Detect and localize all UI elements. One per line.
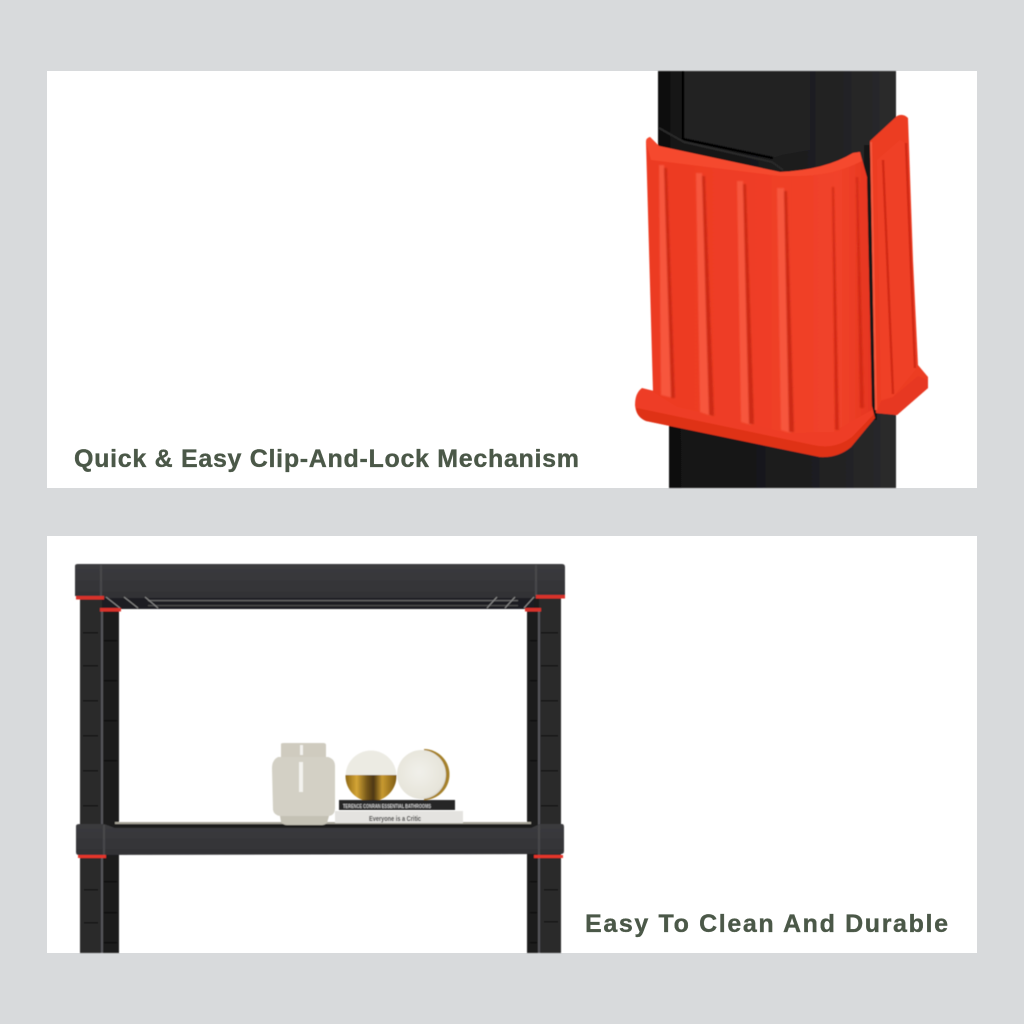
gold and white sphere <box>346 750 396 802</box>
top shelf <box>75 564 565 609</box>
red clip accents, middle shelf <box>78 855 563 858</box>
clip flange <box>635 388 875 457</box>
clip body <box>646 137 872 433</box>
books <box>335 800 463 823</box>
panel background <box>47 71 977 488</box>
left post <box>80 598 119 953</box>
books: Everyone is a Critic <box>369 816 421 823</box>
red clip accents, top shelf <box>76 595 565 612</box>
clip top rim <box>646 137 862 176</box>
panel: clip-and-lock mechanism <box>47 71 977 488</box>
clip ribs <box>659 165 864 433</box>
panel: easy to clean <box>47 536 977 953</box>
right post <box>527 598 561 953</box>
heading: easy to clean: Easy To Clean And Durable <box>585 910 948 938</box>
red clip right piece <box>870 115 928 415</box>
white sphere <box>397 749 450 800</box>
middle shelf <box>76 822 564 855</box>
photo: black shelving unit <box>75 564 565 953</box>
vase <box>272 743 335 825</box>
heading: clip-and-lock: Quick & Easy Clip-And-Lock Mechanism <box>74 445 579 473</box>
red clip front piece <box>635 137 875 457</box>
lower black post <box>669 400 896 488</box>
books: TERENCE CONRAN ESSENTIAL BATHROOMS <box>343 804 431 810</box>
panel background <box>47 536 977 953</box>
dark gap between clips <box>864 145 877 420</box>
photo: black post with red clip <box>635 71 928 488</box>
upper black post <box>658 71 896 181</box>
